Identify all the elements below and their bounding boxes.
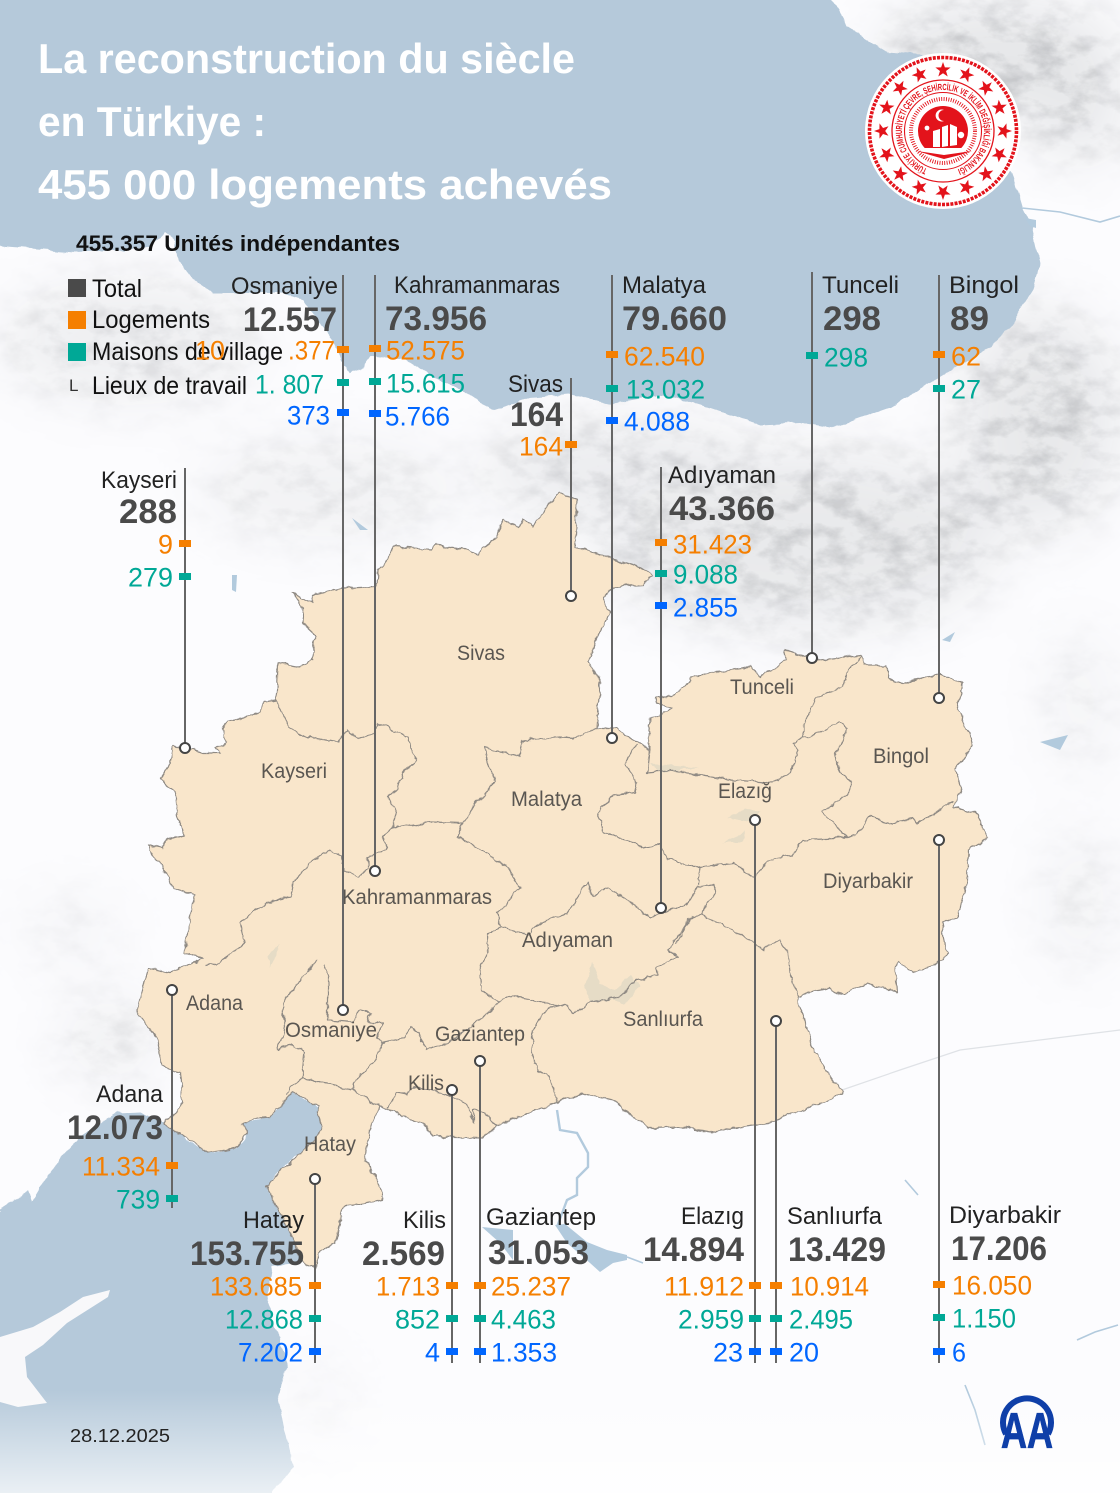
callout: Hatay: Hatay — [243, 1207, 304, 1234]
callout: Tunceli: Tunceli — [822, 272, 899, 299]
callout: Kayseri — [101, 467, 191, 753]
callout: Elazig: 23 — [713, 1338, 743, 1368]
callout: Malatya: 79.660 — [622, 300, 727, 338]
province names: Malatya — [511, 788, 582, 811]
callout: Hatay: 7.202 — [238, 1338, 303, 1368]
callout: Tunceli: 298 — [823, 300, 881, 338]
province area — [137, 493, 987, 1268]
callout: Adiyaman: 9.088 — [673, 560, 738, 590]
callout: Adiyaman: 43.366 — [669, 490, 775, 528]
province names: Kayseri — [261, 760, 327, 783]
callout: Kahramanmaras: 15.615 — [386, 368, 465, 398]
callout: Sanliurfa: Sanlıurfa — [787, 1203, 883, 1230]
callout: Malatya: 13.032 — [626, 374, 705, 404]
callout: Kahramanmaras: 52.575 — [386, 336, 465, 366]
sea: Mediterranean — [0, 1092, 322, 1493]
callout: Elazig: 2.959 — [678, 1304, 744, 1334]
callout: Adana: 11.334 — [82, 1152, 160, 1182]
callout: Tunceli — [806, 272, 899, 663]
legend — [68, 275, 283, 400]
callout: Kayseri: 288 — [119, 493, 177, 531]
callout: Bingol: 27 — [951, 374, 981, 404]
callout: Gaziantep: Gaziantep — [486, 1204, 596, 1231]
subtitle: 455.357 Unités indépendantes — [76, 231, 400, 256]
callout: Sanliurfa — [770, 1016, 886, 1368]
province names: Elazığ — [718, 780, 772, 803]
province names: Kilis — [408, 1072, 444, 1095]
callout: Adana: 12.073 — [67, 1109, 163, 1147]
callout: Adana: 739 — [116, 1184, 160, 1214]
callout: Malatya: 4.088 — [624, 406, 690, 436]
callout: Malatya: 62.540 — [624, 342, 705, 372]
callout: Malatya: Malatya — [622, 272, 707, 299]
province names: Bingol — [873, 745, 929, 768]
callout: Adiyaman: 31.423 — [673, 530, 752, 560]
Syria border — [842, 1030, 1120, 1090]
callout: Adiyaman: 2.855 — [673, 592, 738, 622]
province names: Kahramanmaras — [342, 886, 492, 909]
legend: total — [68, 275, 142, 303]
province names: Osmaniye — [285, 1019, 377, 1042]
legend: maisons de village: Maisons de village — [92, 338, 283, 366]
callout: Diyarbakir: 16.050 — [952, 1270, 1032, 1300]
legend: lieux de travail: Lieux de travail — [92, 372, 247, 400]
callout: Hatay: 153.755 — [190, 1235, 304, 1273]
callout: Kayseri: Kayseri — [101, 467, 177, 494]
callout: Kilis: 4 — [425, 1338, 440, 1368]
date: 28.12.2025 — [70, 1426, 170, 1446]
callout: Osmaniye: .377 — [288, 336, 335, 366]
callout: Osmaniye: Osmaniye — [231, 273, 338, 300]
callout: Elazig: 11.912 — [664, 1272, 744, 1302]
callout: Kayseri: 279 — [128, 562, 173, 592]
title: 455 000 logements achevés — [38, 161, 612, 208]
callout: Osmaniye: 1. 807 — [255, 370, 324, 400]
icon: AA logo — [1001, 1398, 1053, 1459]
legend: total: Total — [92, 275, 142, 303]
callout: Adana: Adana — [96, 1081, 164, 1108]
bottom fade — [0, 1390, 1120, 1493]
callout: Gaziantep: 25.237 — [491, 1272, 571, 1302]
callout: Diyarbakir: 6 — [952, 1338, 966, 1368]
callout: Osmaniye: 373 — [287, 400, 330, 430]
callout: Sivas — [508, 371, 577, 601]
callout: Sanliurfa: 2.495 — [789, 1304, 853, 1334]
callout: Adana — [67, 985, 178, 1214]
callout: Hatay — [190, 1174, 321, 1368]
callout: Kahramanmaras — [369, 272, 560, 876]
callout: Gaziantep: 1.353 — [491, 1338, 557, 1368]
callout: Diyarbakir: Diyarbakir — [949, 1202, 1061, 1229]
callout: Bingol: 89 — [950, 300, 989, 338]
map of earthquake provinces — [137, 493, 987, 1268]
province names: Gaziantep — [435, 1023, 525, 1046]
callout: Kilis: 852 — [395, 1304, 440, 1334]
callout: Adiyaman — [655, 462, 776, 913]
province names: Tunceli — [730, 676, 794, 699]
province names: Sivas — [457, 642, 505, 665]
title: en Türkiye : — [38, 98, 266, 145]
callout: Gaziantep: 4.463 — [491, 1304, 556, 1334]
callout: Kilis: Kilis — [403, 1207, 446, 1234]
rivers and lakes — [232, 208, 1120, 1445]
title — [38, 35, 612, 208]
callout: Kilis — [362, 1085, 458, 1368]
callout: Sanliurfa: 10.914 — [790, 1272, 869, 1302]
province names: Sanlıurfa — [623, 1008, 703, 1031]
province names — [186, 642, 929, 1156]
callout: Kilis: 2.569 — [362, 1235, 445, 1273]
province names: Diyarbakir — [823, 870, 913, 893]
province names: Adıyaman — [522, 929, 613, 952]
callout: Osmaniye — [195, 273, 349, 1015]
province names: Adana — [186, 992, 243, 1015]
callout: Adiyaman: Adıyaman — [668, 462, 776, 489]
callout: Kilis: 1.713 — [376, 1272, 440, 1302]
callout: Sivas: 164 — [510, 396, 563, 434]
callout: Diyarbakir — [933, 835, 1061, 1368]
ministry seal — [865, 53, 1021, 209]
callout: Kayseri: 9 — [158, 530, 173, 560]
callout: Elazig: 14.894 — [643, 1231, 744, 1269]
Cyprus — [0, 1290, 110, 1407]
callout: Kahramanmaras: Kahramanmaras — [394, 272, 560, 299]
callout: Hatay: 133.685 — [210, 1272, 302, 1302]
land relief texture — [0, 0, 1120, 1084]
callout: Sanliurfa: 13.429 — [788, 1231, 886, 1269]
callout: Hatay: 12.868 — [225, 1304, 303, 1334]
callout: Elazig: Elazıg — [681, 1203, 744, 1230]
callout: Bingol — [933, 272, 1019, 703]
callout: Diyarbakir: 17.206 — [951, 1230, 1047, 1268]
callout: Kahramanmaras: 5.766 — [385, 402, 450, 432]
callout: Gaziantep: 31.053 — [488, 1234, 589, 1272]
callout: Osmaniye: 12.557 — [243, 301, 337, 339]
callout: Gaziantep — [474, 1056, 596, 1368]
legend: lieux de travail: L — [69, 376, 78, 395]
callout: Tunceli: 298 — [824, 342, 868, 372]
callout: Bingol: 62 — [951, 342, 981, 372]
callout: Bingol: Bingol — [949, 272, 1019, 299]
callout: Diyarbakir: 1.150 — [952, 1304, 1016, 1334]
callout: Sivas: 164 — [519, 432, 563, 462]
legend: logements: Logements — [92, 306, 210, 334]
callout: Elazig — [643, 815, 761, 1368]
callout: Kahramanmaras: 73.956 — [385, 300, 487, 338]
icon: AA logo: AA — [1001, 1403, 1053, 1459]
callout: Sanliurfa: 20 — [789, 1338, 819, 1368]
province names: Hatay — [304, 1133, 356, 1156]
title: La reconstruction du siècle — [38, 35, 575, 82]
sea: Black Sea — [0, 0, 1040, 428]
callout: Sivas: Sivas — [508, 371, 563, 398]
callout: Malatya — [606, 272, 727, 743]
ministry seal: TÜRKİYE CUMHURİYETİ ÇEVRE, ŞEHİRCİLİK VE İKLİM DEĞİŞİKLİĞİ BAKANLIĞI — [894, 82, 992, 176]
callout: Osmaniye: 10 — [195, 336, 225, 366]
